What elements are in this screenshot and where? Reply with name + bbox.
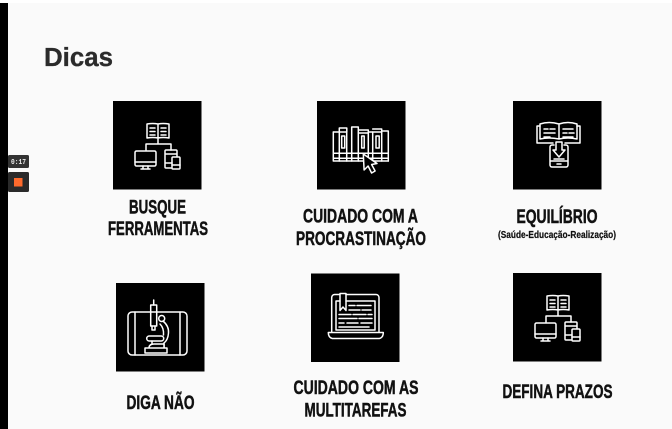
card: cuidado com a procrastinacao bbox=[296, 101, 426, 250]
icon: book linked to devices bbox=[513, 273, 602, 362]
stop button bbox=[8, 172, 29, 192]
label: CUIDADO COM A bbox=[303, 206, 418, 228]
icon: books with cursor bbox=[317, 101, 406, 190]
label: DIGA NÃO bbox=[126, 391, 194, 414]
recording timer: 0:17 bbox=[11, 159, 26, 167]
icon: laptop with bookmarked page bbox=[311, 274, 400, 362]
label bbox=[296, 206, 426, 250]
icon: microscope on tablet bbox=[116, 283, 204, 372]
label: PROCRASTINAÇÃO bbox=[296, 227, 426, 250]
card: diga nao bbox=[116, 283, 204, 414]
label: EQUILÍBRIO bbox=[516, 205, 598, 228]
title: Dicas bbox=[44, 44, 113, 72]
label: (Saúde-Educação-Realização) bbox=[498, 230, 616, 241]
label: MULTITAREFAS bbox=[304, 400, 406, 422]
label: BUSQUE bbox=[129, 196, 186, 218]
label: FERRAMENTAS bbox=[108, 218, 208, 240]
left black bar bbox=[0, 3, 8, 429]
icon: book linked to devices bbox=[113, 101, 202, 190]
recording timer bbox=[8, 155, 29, 168]
label bbox=[498, 205, 616, 241]
label: CUIDADO COM AS bbox=[294, 377, 418, 399]
card: equilibrio bbox=[498, 101, 616, 241]
label bbox=[108, 196, 208, 240]
icon: book downloading to phone bbox=[513, 101, 602, 190]
card: busque ferramentas bbox=[108, 101, 208, 240]
label: DEFINA PRAZOS bbox=[502, 381, 612, 403]
card: defina prazos bbox=[502, 273, 612, 403]
label bbox=[294, 377, 418, 422]
card: cuidado com as multitarefas bbox=[294, 274, 418, 422]
